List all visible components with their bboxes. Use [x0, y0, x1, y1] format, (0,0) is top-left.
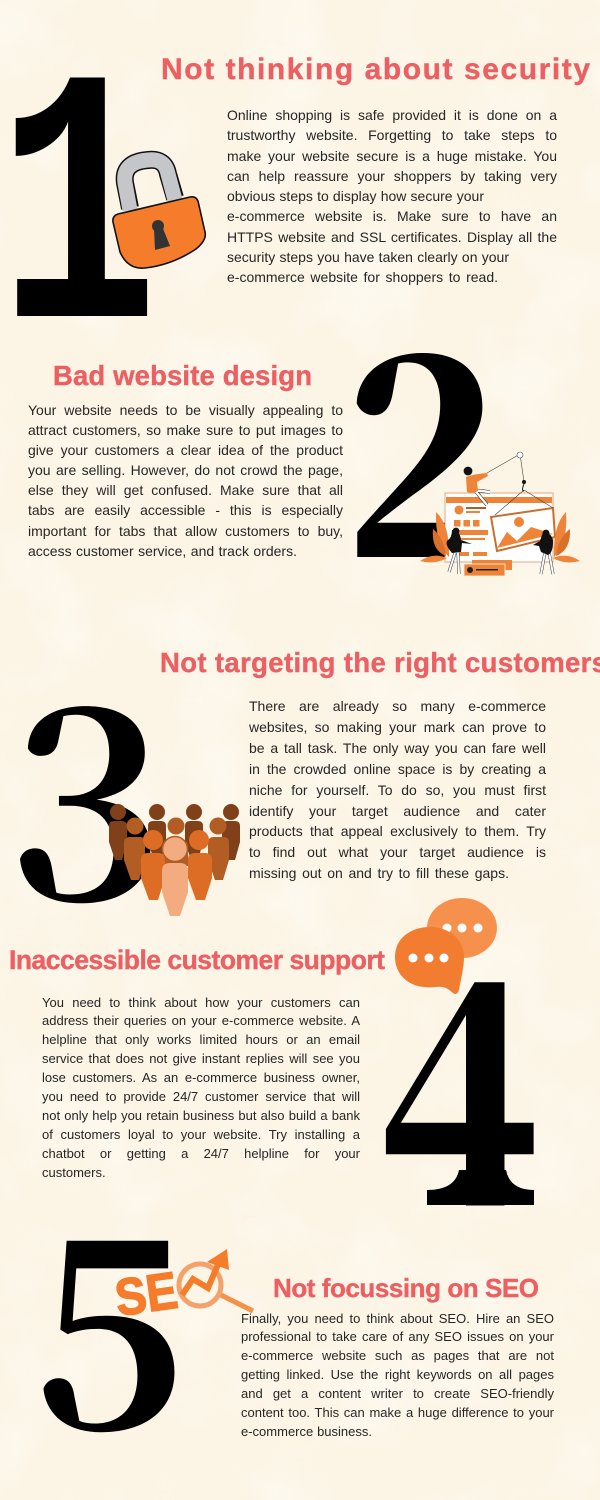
- numeral 3: 3: [7, 594, 163, 975]
- icon: SEO magnifier with arrow: SE: [112, 1262, 181, 1328]
- text block: website design: else they will get confused. Make sure that all: [28, 482, 343, 498]
- text block: SEO: e-commerce website such as pages that are not: [241, 1348, 554, 1363]
- text block: target customers: niche for yourself. To do so, you must first: [249, 782, 546, 798]
- numeral 2: 2: [342, 237, 500, 637]
- text block: security: [227, 107, 558, 285]
- text block: SEO: and get a content writer to create SEO-friendly: [241, 1386, 554, 1401]
- text block: security: e-commerce website is. Make sure to have an: [227, 208, 557, 224]
- text block: SEO: content too. This can make a huge difference to your: [241, 1405, 554, 1420]
- text block: website design: give your customers a clear idea of the product: [28, 442, 343, 458]
- text block: website design: Your website needs to be visually appealing to: [28, 402, 343, 418]
- heading: Not targeting the right customers: Not targeting the right customers: [160, 647, 600, 678]
- text block: target customers: websites, so making your mark can prove to: [249, 719, 546, 735]
- text block: customer support: lose customers. As an e-commerce business owner,: [42, 1070, 360, 1085]
- text block: customer support: service that does not give instant replies will see you: [42, 1051, 360, 1066]
- text block: target customers: to find out what your target audience is: [249, 844, 546, 860]
- text block: target customers: products that appeal exclusively to them. Try: [249, 823, 546, 839]
- text block: website design: tabs are easily accessible - this is especially: [28, 502, 343, 518]
- man pulling: [473, 488, 490, 505]
- text block: website design: attract customers, so make sure to put images to: [28, 422, 343, 438]
- text block: security: make your website secure is a huge mistake. You: [227, 148, 557, 164]
- illustration: website under construction: [420, 452, 580, 576]
- text block: customer support: of customers loyal to your website. Try installing a: [42, 1127, 360, 1142]
- text block: security: e-commerce website for shoppers to read.: [227, 269, 498, 285]
- crane ropes: [487, 454, 553, 515]
- icon: chat bubbles: [395, 898, 497, 994]
- text block: security: security steps you have taken clearly on your: [227, 249, 509, 265]
- heading: Not focussing on SEO: Not focussing on SEO: [273, 1273, 539, 1303]
- text block: customer support: [42, 994, 360, 1180]
- heading: Bad website design: Bad website design: [53, 360, 312, 391]
- heading: Inaccessible customer support: Inaccessible customer support: [9, 945, 385, 975]
- framed picture: [491, 508, 555, 551]
- text block: security: Online shopping is safe provided it is done on a: [227, 107, 557, 123]
- text block: SEO: professional to take care of any SEO issues on your: [241, 1329, 554, 1344]
- text block: SEO: [241, 1310, 554, 1439]
- text block: customer support: helpline that only works limited hours or an email: [42, 1032, 360, 1047]
- text block: target customers: be a tall task. The only way you can fare well: [249, 740, 546, 756]
- left person: [449, 553, 459, 574]
- text block: security: trustworthy website. Forgetting to take steps to: [227, 127, 557, 143]
- text block: SEO: getting linked. Use the right keywords on all pages: [241, 1367, 554, 1382]
- text block: website design: access customer service, and track orders.: [28, 543, 297, 559]
- numeral 5: 5: [32, 1125, 185, 1500]
- icon: padlock: [113, 160, 205, 268]
- text block: website design: important for tabs that allow customers to buy,: [28, 523, 343, 539]
- icon: SEO magnifier with arrow: [112, 1249, 253, 1328]
- browser window: [445, 493, 553, 562]
- text block: target customers: missing out on and try to fill these gaps.: [249, 865, 509, 881]
- floating cards: [472, 560, 512, 570]
- text block: customer support: not only help you retain business but also build a bank: [42, 1108, 360, 1123]
- numeral 1: 1: [0, 15, 158, 425]
- text block: security: HTTPS website and SSL certificates. Display all the: [227, 228, 557, 244]
- text block: customer support: customers.: [42, 1165, 106, 1180]
- text block: website design: you are selling. However, do not crowd the page,: [28, 462, 343, 478]
- text block: target customers: in the crowded online space is by creating a: [249, 761, 546, 777]
- left and right plants: [436, 512, 449, 557]
- heading: Not thinking about security: Not thinking about security: [161, 53, 590, 86]
- text block: security: can help reassure your shoppers by taking very: [227, 168, 557, 184]
- icon: crowd of people: [109, 804, 240, 916]
- text block: SEO: Finally, you need to think about SEO. Hire an SEO: [241, 1310, 554, 1326]
- text block: customer support: address their queries on your e-commerce website. A: [42, 1013, 360, 1028]
- text block: customer support: You need to think about how your customers can: [42, 994, 360, 1010]
- numeral 4: 4: [379, 857, 542, 1288]
- text block: target customers: There are already so many e-commerce: [249, 698, 546, 714]
- text block: SEO: e-commerce business.: [241, 1424, 372, 1439]
- text block: website design: [28, 402, 343, 559]
- text block: customer support: you need to provide 24/7 customer service that will: [42, 1089, 360, 1104]
- right person: [541, 552, 553, 574]
- text block: target customers: identify your target audience and cater: [249, 803, 546, 819]
- text block: customer support: chatbot or getting a 24/7 helpline for your: [42, 1146, 360, 1161]
- text block: target customers: [249, 698, 546, 881]
- text block: security: obvious steps to display how secure your: [227, 188, 484, 204]
